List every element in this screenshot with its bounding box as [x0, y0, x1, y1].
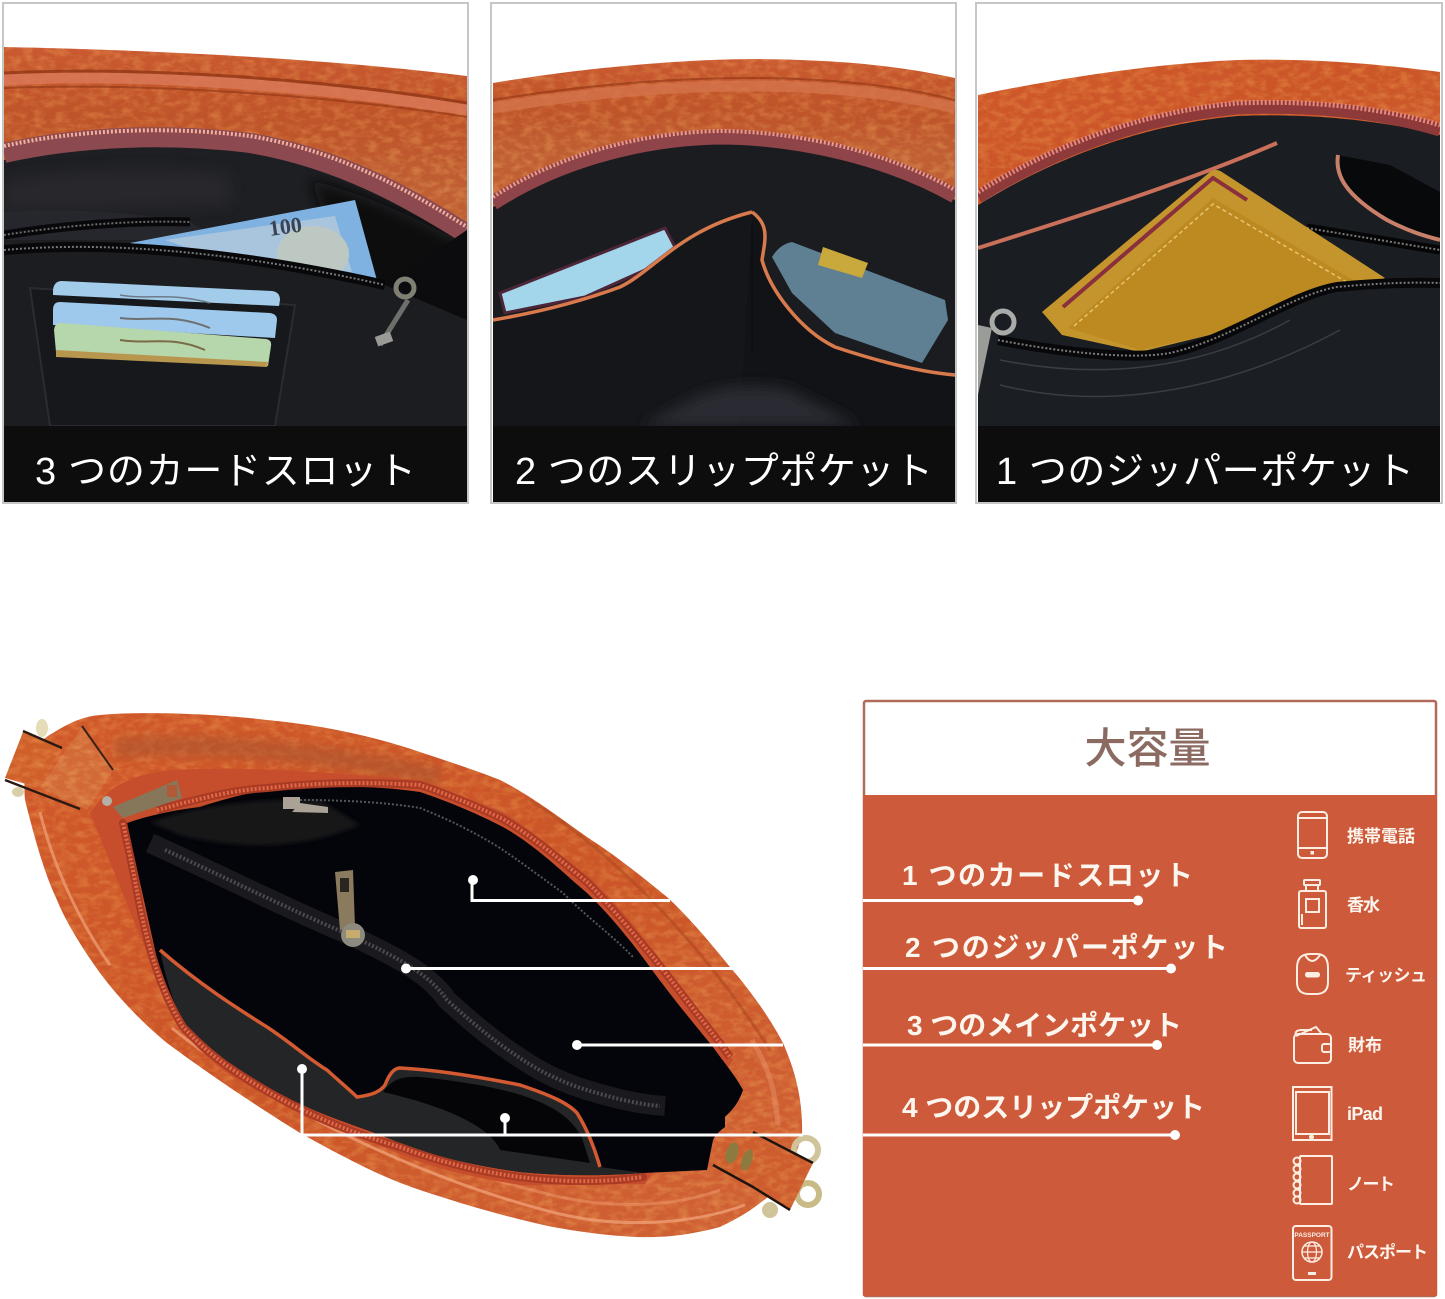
callout lines: pointers from bag to labels [297, 875, 1180, 1140]
bag slip pocket left [160, 950, 643, 1175]
label: notebook: ノート [1347, 1175, 1395, 1194]
bag long inner zipper [150, 843, 665, 1106]
icon: wallet [1294, 1027, 1331, 1063]
icon: passport: PASSPORT [1294, 1232, 1330, 1239]
photo: card slot pocket: 100 [267, 212, 303, 241]
label: card slot: 1 つのカードスロット [902, 860, 1193, 891]
label: slip pockets: 4 つのスリップポケット [902, 1092, 1205, 1123]
heading: large capacity: 大容量 [1084, 725, 1210, 772]
bag leather body [24, 713, 802, 1237]
photo: zipper pocket with wallet [978, 60, 1440, 426]
panel: one zipper pocket [976, 3, 1442, 503]
bag front zipper pull [335, 870, 365, 947]
panel: two slip pockets [491, 3, 956, 503]
panel: capacity [863, 701, 1437, 1296]
bag slip pocket right inner shadow [383, 1077, 590, 1163]
bag shoulder strap tabs [5, 719, 819, 1218]
photo: card slot pocket [4, 47, 467, 426]
bag lining black interior [127, 786, 743, 1175]
label: iPad: iPad [1347, 1104, 1383, 1124]
icon: notebook [1294, 1156, 1332, 1204]
bag main orange zipper [123, 783, 730, 1181]
bag leather rim highlights [40, 746, 778, 1223]
bag upper zipper pull [283, 797, 328, 813]
label: zipper pockets: 2 つのジッパーポケット [905, 932, 1228, 963]
panel: three card slots [3, 3, 468, 503]
photo: open shoulder bag interior [5, 713, 819, 1237]
label: mobile phone: 携帯電話 [1347, 827, 1415, 846]
caption: 2 slip pockets: 2 つのスリップポケット [515, 451, 933, 493]
caption: 3 card slots: 3 つのカードスロット [35, 451, 416, 493]
bag orange fabric lining and zipper band [90, 769, 733, 1185]
bag top zipper pull [102, 780, 182, 818]
label: perfume: 香水 [1347, 896, 1380, 915]
icon: tissue [1297, 954, 1328, 994]
label: main pockets: 3 つのメインポケット [907, 1010, 1182, 1041]
icon: phone [1298, 812, 1327, 858]
icon: perfume [1299, 880, 1326, 928]
icon: tablet [1293, 1087, 1332, 1140]
bag upper inner zipper [300, 800, 633, 957]
caption: 1 zipper pocket: 1 つのジッパーポケット [996, 451, 1414, 493]
photo: slip pockets [493, 59, 955, 426]
label: passport: パスポート [1347, 1242, 1428, 1262]
icon: passport [1293, 1226, 1332, 1280]
label: wallet: 財布 [1348, 1036, 1382, 1055]
label: tissue: ティッシュ [1345, 966, 1427, 985]
bag pocket piping [160, 950, 600, 1167]
